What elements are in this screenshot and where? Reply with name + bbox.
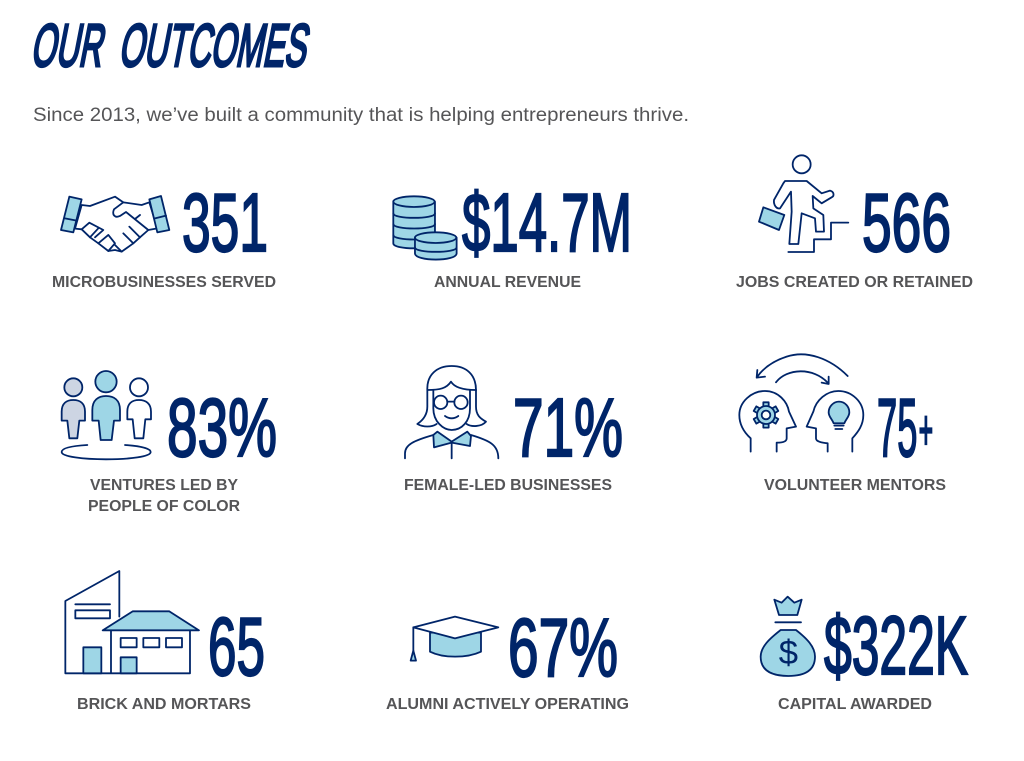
- label: microbusinesses served: MICROBUSINESSES SERVED: [52, 274, 276, 291]
- title: [27, 12, 316, 79]
- label: annual revenue: ANNUAL REVENUE: [434, 274, 581, 291]
- label: female-led businesses: FEMALE-LED BUSINESSES: [404, 477, 612, 494]
- icon: person climbing stairs: [759, 155, 848, 252]
- icon: two heads exchanging ideas: [739, 354, 863, 452]
- icon: graduation cap: [411, 617, 498, 661]
- label: ventures led by people of color: VENTURES LED BY: [90, 477, 238, 494]
- stat: volunteer mentors: [739, 354, 946, 494]
- number: 65: 65: [208, 600, 265, 693]
- icon: three people: [62, 371, 151, 459]
- number: 71%: 71%: [513, 381, 623, 474]
- title: OUR: [27, 12, 112, 79]
- number: $14.7M: $14.7M: [462, 176, 632, 269]
- stat: ventures led by people of color: [62, 371, 277, 515]
- stat: brick and mortars: [65, 571, 265, 713]
- stat: alumni actively operating: [386, 601, 629, 713]
- label: ventures led by people of color: PEOPLE OF COLOR: [88, 498, 240, 515]
- label: capital awarded: CAPITAL AWARDED: [778, 696, 932, 713]
- stat: capital awarded: [761, 597, 968, 713]
- number: 75+: 75: [877, 381, 969, 474]
- label: alumni actively operating: ALUMNI ACTIVELY OPERATING: [386, 696, 629, 713]
- stat: annual revenue: [393, 176, 632, 291]
- label: volunteer mentors: VOLUNTEER MENTORS: [764, 477, 946, 494]
- icon: money bag: [761, 597, 815, 676]
- icon: handshake: [61, 196, 169, 252]
- stat: volunteer mentors: +: [919, 398, 933, 461]
- stat: microbusinesses served: [52, 176, 276, 291]
- icon: buildings: [65, 571, 199, 673]
- label: jobs created or retained: JOBS CREATED OR RETAINED: [736, 274, 973, 291]
- icon: woman with glasses: [405, 366, 498, 458]
- number: 83%: 83%: [167, 381, 277, 474]
- label: brick and mortars: BRICK AND MORTARS: [77, 696, 251, 713]
- number: 351: 351: [182, 176, 268, 269]
- number: 67%: 67%: [508, 601, 618, 694]
- label: ventures led by people of color: [88, 477, 240, 515]
- icon: coin stacks: [393, 196, 457, 260]
- stat: female-led businesses: [404, 366, 623, 494]
- subtitle: Since 2013, we’ve built a community that is helping entrepreneurs thrive.: [33, 105, 689, 126]
- icon: money bag: $: [779, 634, 798, 672]
- stat: jobs created or retained: [736, 155, 973, 291]
- number: 566: 566: [862, 176, 951, 269]
- title: OUTCOMES: [115, 12, 316, 79]
